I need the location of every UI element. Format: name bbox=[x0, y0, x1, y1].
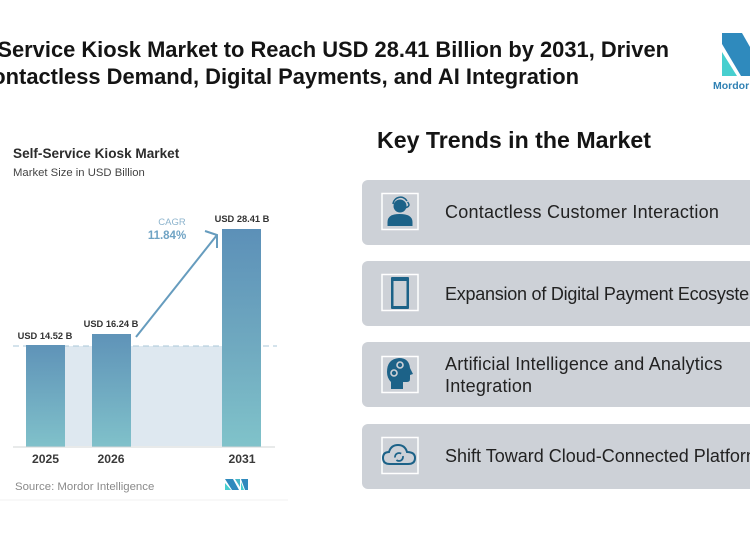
logo: Mordor: Mordor bbox=[713, 80, 749, 92]
year labels: 2026 bbox=[97, 452, 125, 466]
year labels: 2031 bbox=[228, 452, 256, 466]
panel: market size chart bbox=[0, 146, 288, 500]
source note: Source: Mordor Intelligence bbox=[15, 481, 154, 493]
dashed reference line bbox=[13, 345, 277, 347]
chart heading: Self-Service Kiosk Market bbox=[13, 146, 180, 161]
icon: smartphone bbox=[382, 274, 418, 310]
label: Integration bbox=[445, 376, 532, 396]
forecast band bbox=[26, 346, 223, 446]
small logo bbox=[225, 479, 248, 490]
chart subheading: Market Size in USD Billion bbox=[13, 167, 145, 179]
bar 2031 bbox=[222, 229, 261, 447]
panel: contactless customer interaction bbox=[362, 180, 750, 245]
title bbox=[0, 37, 669, 89]
value label 2026: USD 16.24 B bbox=[84, 319, 139, 329]
icon: cloud sync bbox=[382, 438, 418, 474]
panel: cloud-connected platforms bbox=[362, 424, 750, 489]
value label 2031: USD 28.41 B bbox=[215, 214, 270, 224]
CAGR value: 11.84% bbox=[148, 230, 186, 242]
heading: key trends: Key Trends in the Market bbox=[377, 127, 651, 153]
logo: Mordor bbox=[713, 33, 750, 92]
CAGR label: CAGR bbox=[158, 217, 186, 228]
icon: headset agent bbox=[382, 194, 418, 230]
bar 2026 bbox=[92, 334, 131, 447]
year labels bbox=[32, 452, 256, 466]
arrow: growth bbox=[136, 231, 217, 337]
chart bottom rule bbox=[0, 499, 288, 501]
icon: head with gears bbox=[382, 356, 418, 392]
panel: digital payment ecosystems bbox=[362, 261, 750, 326]
label: Contactless Customer Interaction bbox=[445, 202, 719, 222]
year labels: 2025 bbox=[32, 452, 59, 466]
axis baseline bbox=[13, 446, 275, 448]
bar 2025 bbox=[26, 345, 65, 447]
value label 2025: USD 14.52 B bbox=[18, 331, 73, 341]
panel: AI and analytics bbox=[362, 342, 750, 407]
label: Artificial Intelligence and Analytics bbox=[445, 354, 723, 374]
